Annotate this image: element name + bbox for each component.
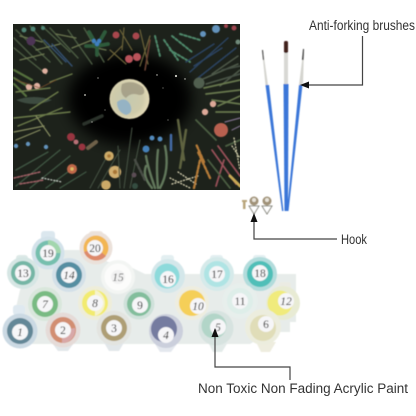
paint pot 4: 4	[163, 330, 169, 342]
paint pot 9	[124, 288, 154, 320]
paint pot 3	[96, 310, 132, 351]
bottom-left flowers	[14, 116, 102, 188]
paint pot 18: 18	[254, 268, 266, 280]
brush: left	[262, 50, 284, 211]
paint pot 14	[52, 258, 86, 292]
left side foliage	[14, 68, 72, 140]
paint pot 1	[2, 305, 38, 348]
paint pot 7: 7	[42, 299, 49, 311]
center black space	[68, 53, 192, 145]
icon: hooks and screw	[242, 196, 272, 214]
paint pot 10	[175, 286, 209, 320]
paint pot 13: 13	[17, 268, 29, 280]
arrow: brushes	[300, 36, 362, 88]
paint pot 13	[7, 255, 39, 289]
paint pot 20	[80, 231, 112, 264]
paint pot 16: 16	[162, 274, 174, 286]
paint pot 2: 2	[60, 325, 66, 337]
paint pot tray	[2, 231, 300, 352]
paint pot 9: 9	[137, 300, 143, 312]
top-right foliage	[155, 24, 240, 86]
paint pot 8: 8	[92, 298, 98, 310]
paint pot 15: 15	[112, 272, 124, 284]
brush: right	[287, 49, 304, 211]
paint pot 15	[101, 260, 135, 294]
top-left foliage	[14, 26, 106, 74]
paint pot 14: 14	[63, 270, 75, 282]
arrow: paint	[212, 328, 290, 380]
paint pot 2	[46, 312, 80, 351]
right side foliage	[194, 66, 240, 130]
paint pot 5: 5	[215, 322, 221, 334]
paint pot 11	[222, 284, 258, 318]
paint pot 12: 12	[280, 296, 292, 308]
painting: moon and botanical wreath	[13, 24, 240, 190]
moon	[110, 79, 150, 119]
paint pot 16	[151, 255, 185, 293]
brushes	[262, 41, 304, 211]
brush: middle	[284, 41, 288, 211]
paint pot 10: 10	[192, 301, 204, 313]
paint pot 5	[198, 310, 234, 352]
label: non toxic paint: Non Toxic Non Fading Acrylic Paint	[198, 381, 408, 396]
bottom-center flowers and grasses	[90, 128, 171, 190]
paint pot 1: 1	[17, 327, 23, 339]
paint pot 11: 11	[234, 296, 246, 308]
paint pot 12	[266, 282, 300, 320]
paint pot 6: 6	[263, 319, 269, 331]
paint pot 17: 17	[211, 269, 223, 281]
top-center berries and red flowers	[86, 28, 150, 70]
bottom-right flowers	[170, 120, 240, 188]
paint pot 7	[28, 287, 62, 321]
paint pot 3: 3	[111, 323, 117, 335]
paint pot 19	[32, 231, 64, 270]
paint pot 19: 19	[42, 248, 54, 260]
label: hook: Hook	[341, 232, 367, 247]
paint pot 6	[245, 309, 281, 352]
arrow: hook	[250, 213, 337, 239]
paint pot 8	[78, 286, 112, 320]
paint pot 4	[149, 314, 183, 352]
paint pot 18	[243, 255, 277, 291]
paint pot 17	[200, 255, 234, 291]
stars	[84, 74, 186, 123]
paint pot 20: 20	[89, 243, 101, 255]
